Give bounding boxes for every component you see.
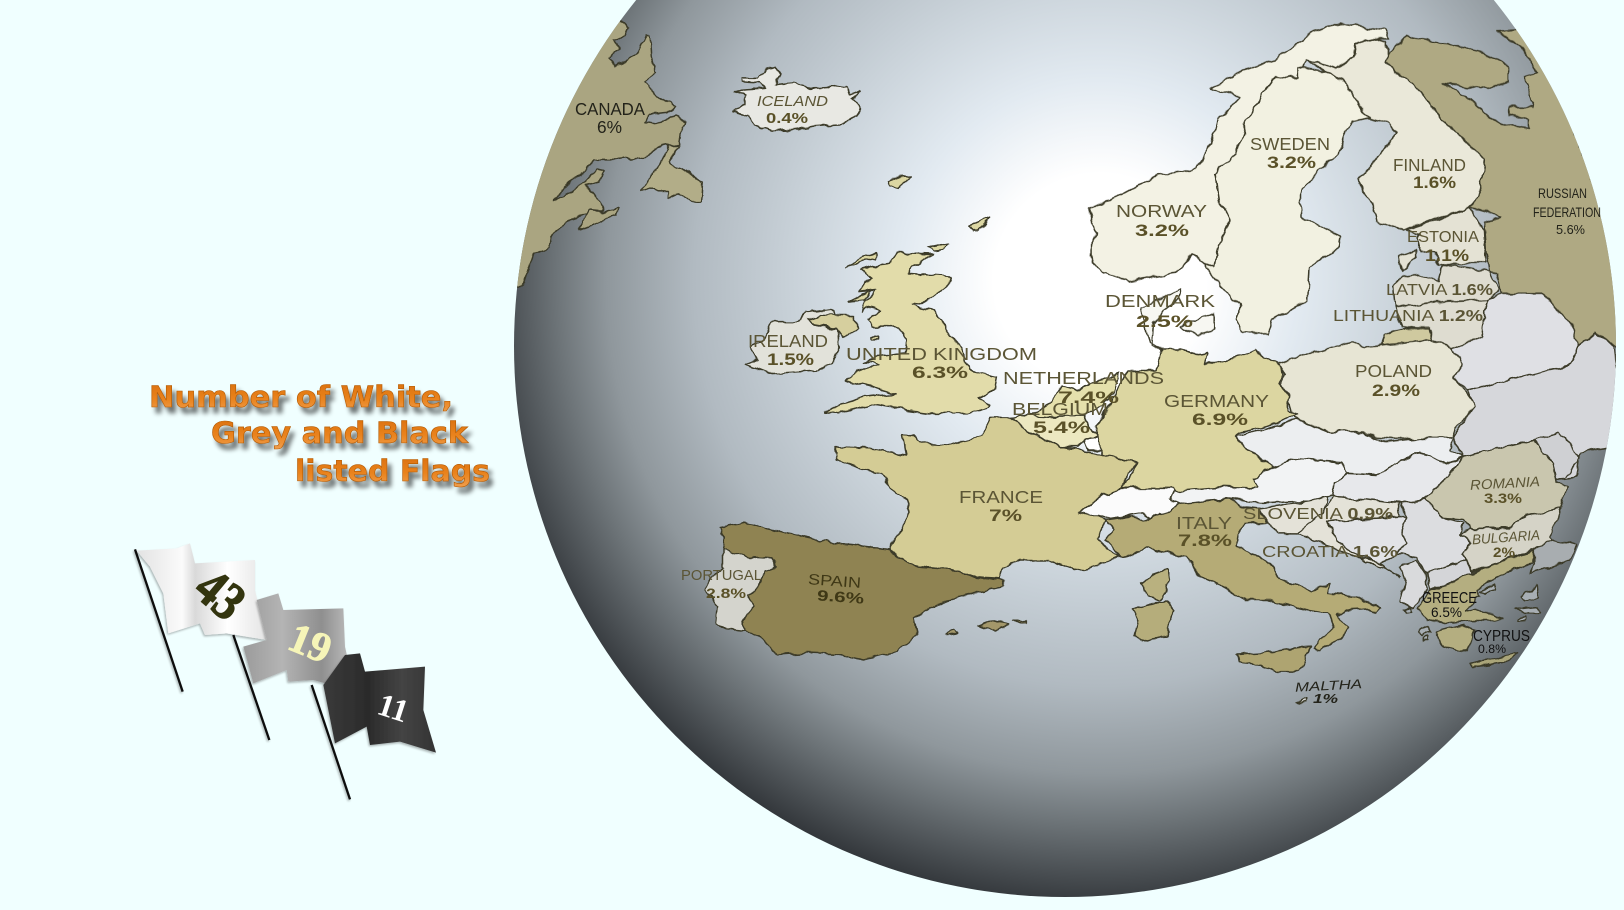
globe bbox=[514, 0, 1616, 897]
country: Portugal bbox=[705, 548, 776, 630]
flag: white, 43: 43 bbox=[184, 556, 258, 632]
label: Romania 3.3%: ROMANIA bbox=[1470, 473, 1540, 493]
country: Ukraine bbox=[1453, 333, 1624, 480]
flag: white, 43 bbox=[135, 543, 267, 692]
country labels: 1.6% bbox=[1413, 173, 1456, 192]
country labels: 5.4% bbox=[1033, 418, 1090, 437]
Sicily bbox=[1237, 647, 1310, 672]
flag: grey, 19 bbox=[233, 593, 355, 740]
country: Slovenia bbox=[1260, 497, 1327, 533]
Northern Ireland bbox=[807, 315, 859, 338]
label: Germany 6.9%: GERMANY bbox=[1164, 391, 1269, 411]
country labels: 1% bbox=[1313, 691, 1339, 706]
country labels: 6% bbox=[597, 117, 622, 137]
country: Italy bbox=[1103, 498, 1380, 650]
Ionian and Aegean islands bbox=[1403, 585, 1540, 640]
country: Austria bbox=[1170, 458, 1348, 503]
country labels: 2% bbox=[1493, 544, 1516, 560]
country: Belgium bbox=[1012, 415, 1097, 447]
label: Belgium 5.4%: BELGIUM bbox=[1012, 399, 1108, 419]
country: Bulgaria bbox=[1460, 508, 1562, 572]
label: Norway 3.2%: NORWAY bbox=[1116, 201, 1207, 221]
Turkey outline bbox=[1530, 540, 1577, 573]
country: Czech Republic and Slovakia bbox=[1235, 420, 1463, 475]
map region: Western Europe bbox=[705, 373, 1174, 660]
label: Estonia 1.1%: ESTONIA bbox=[1407, 229, 1479, 246]
country: Belarus bbox=[1452, 293, 1578, 390]
label: United Kingdom 6.3%: UNITED KINGDOM bbox=[846, 344, 1037, 364]
country: Denmark bbox=[1141, 288, 1215, 350]
country: Germany bbox=[1096, 350, 1296, 492]
label: Sweden 3.2%: SWEDEN bbox=[1250, 134, 1330, 154]
country labels: 6.9% bbox=[1192, 410, 1248, 429]
map of countries on the globe bbox=[500, 18, 1624, 703]
Crete bbox=[1470, 652, 1517, 667]
country labels bbox=[575, 93, 1601, 706]
country: Hungary bbox=[1333, 453, 1463, 503]
country labels: 2.8% bbox=[706, 585, 747, 601]
country: Greece bbox=[1418, 552, 1533, 623]
label: Canada 6%: CANADA bbox=[575, 99, 645, 119]
country labels: 3.3% bbox=[1484, 490, 1523, 506]
label: Ireland 1.5%: IRELAND bbox=[748, 331, 828, 351]
country: Albania bbox=[1400, 560, 1427, 608]
Canada: Nova Scotia bbox=[579, 208, 618, 230]
Balearic Islands bbox=[946, 620, 1028, 635]
map region: Atlantic and British Isles bbox=[500, 18, 996, 413]
Faroe Islands bbox=[887, 176, 911, 188]
label: Bulgaria 2%: BULGARIA bbox=[1471, 527, 1540, 547]
country labels: 6.3% bbox=[912, 363, 968, 382]
country: Bosnia bbox=[1327, 517, 1407, 563]
title: Grey and Black bbox=[211, 416, 469, 450]
label: Spain 9.6%: SPAIN bbox=[808, 571, 862, 592]
label: Slovenia 0.9%: SLOVENIA 0.9% bbox=[1243, 506, 1393, 523]
Hebrides bbox=[845, 252, 879, 339]
country: Serbia bbox=[1397, 498, 1472, 573]
flag: black, 11 bbox=[312, 653, 436, 799]
country labels: 3.2% bbox=[1135, 221, 1189, 240]
country: Netherlands bbox=[1031, 373, 1119, 417]
title: Number of White, bbox=[149, 380, 453, 414]
country labels: 3.2% bbox=[1267, 153, 1316, 172]
Peloponnese bbox=[1435, 625, 1475, 652]
country: Ireland bbox=[746, 308, 839, 373]
label: Russian Federation 5.6%: RUSSIAN bbox=[1538, 185, 1587, 201]
country labels: 6.5% bbox=[1431, 604, 1462, 620]
label: Finland 1.6%: FINLAND bbox=[1393, 155, 1466, 175]
flags illustration bbox=[135, 543, 436, 799]
Kaliningrad bbox=[1380, 328, 1432, 345]
flag: grey, 19: 19 bbox=[282, 615, 338, 673]
label: Denmark 2.5%: DENMARK bbox=[1105, 291, 1215, 311]
country labels: 2.9% bbox=[1372, 381, 1420, 400]
country: Poland bbox=[1278, 340, 1475, 445]
label: France 7%: FRANCE bbox=[959, 487, 1043, 507]
country: Sweden bbox=[1204, 67, 1369, 333]
country: France bbox=[835, 418, 1139, 578]
label: Cyprus 0.8%: CYPRUS bbox=[1473, 628, 1530, 645]
country: Moldova bbox=[1533, 433, 1580, 480]
country labels: 2.5% bbox=[1136, 312, 1193, 331]
country labels: 7.4% bbox=[1058, 388, 1119, 407]
flag: black, 11: 11 bbox=[373, 686, 413, 729]
label: Netherlands 7.4%: NETHERLANDS bbox=[1003, 368, 1164, 388]
label: Lithuania 1.2%: LITHUANIA 1.2% bbox=[1333, 308, 1483, 325]
label: Croatia 1.6%: CROATIA 1.6% bbox=[1262, 544, 1398, 561]
Shetland Islands bbox=[929, 217, 991, 252]
country: Norway bbox=[1091, 23, 1389, 282]
country: Macedonia bbox=[1427, 560, 1472, 588]
label: Italy 7.8%: ITALY bbox=[1176, 513, 1232, 533]
country: Croatia bbox=[1297, 497, 1400, 577]
Luxembourg bbox=[1085, 437, 1103, 450]
map region: Nordics, Baltics and Eastern Europe bbox=[1091, 23, 1624, 445]
label: Maltha 1%: MALTHA bbox=[1295, 676, 1362, 695]
country: Estonia bbox=[1398, 208, 1486, 272]
title: listed Flags bbox=[295, 454, 490, 488]
title bbox=[149, 380, 490, 488]
country labels: FEDERATION bbox=[1533, 204, 1601, 220]
country: Russian Federation bbox=[1386, 30, 1624, 367]
country: Finland bbox=[1306, 38, 1484, 230]
label: Iceland 0.4%: ICELAND bbox=[757, 93, 828, 110]
country labels: 7.8% bbox=[1178, 531, 1232, 550]
country: Latvia bbox=[1393, 265, 1499, 307]
country labels: 1.5% bbox=[767, 350, 814, 369]
Canada: Newfoundland bbox=[639, 145, 702, 202]
label: Greece 6.5%: GREECE bbox=[1422, 590, 1477, 607]
Sardinia bbox=[1131, 602, 1174, 640]
country labels: 0.4% bbox=[766, 110, 808, 127]
country: Switzerland bbox=[1078, 485, 1178, 519]
country: Canada bbox=[500, 18, 686, 287]
label: Latvia 1.6%: LATVIA 1.6% bbox=[1386, 282, 1493, 299]
label: Portugal 2.8%: PORTUGAL bbox=[681, 567, 762, 584]
country labels: 7% bbox=[989, 506, 1022, 525]
Malta bbox=[1297, 697, 1308, 703]
Corsica bbox=[1142, 570, 1169, 600]
country labels: 1.1% bbox=[1425, 246, 1469, 265]
label: Poland 2.9%: POLAND bbox=[1355, 361, 1432, 381]
country: Iceland bbox=[733, 67, 861, 131]
country labels: 9.6% bbox=[816, 587, 865, 608]
country: Spain bbox=[719, 522, 1005, 660]
country: Lithuania bbox=[1395, 300, 1488, 348]
country labels: 5.6% bbox=[1556, 222, 1585, 237]
map region: Balkans and Italy bbox=[1103, 420, 1580, 703]
country: United Kingdom bbox=[825, 253, 996, 413]
country labels: 0.8% bbox=[1478, 642, 1506, 656]
country: Romania bbox=[1425, 440, 1567, 528]
